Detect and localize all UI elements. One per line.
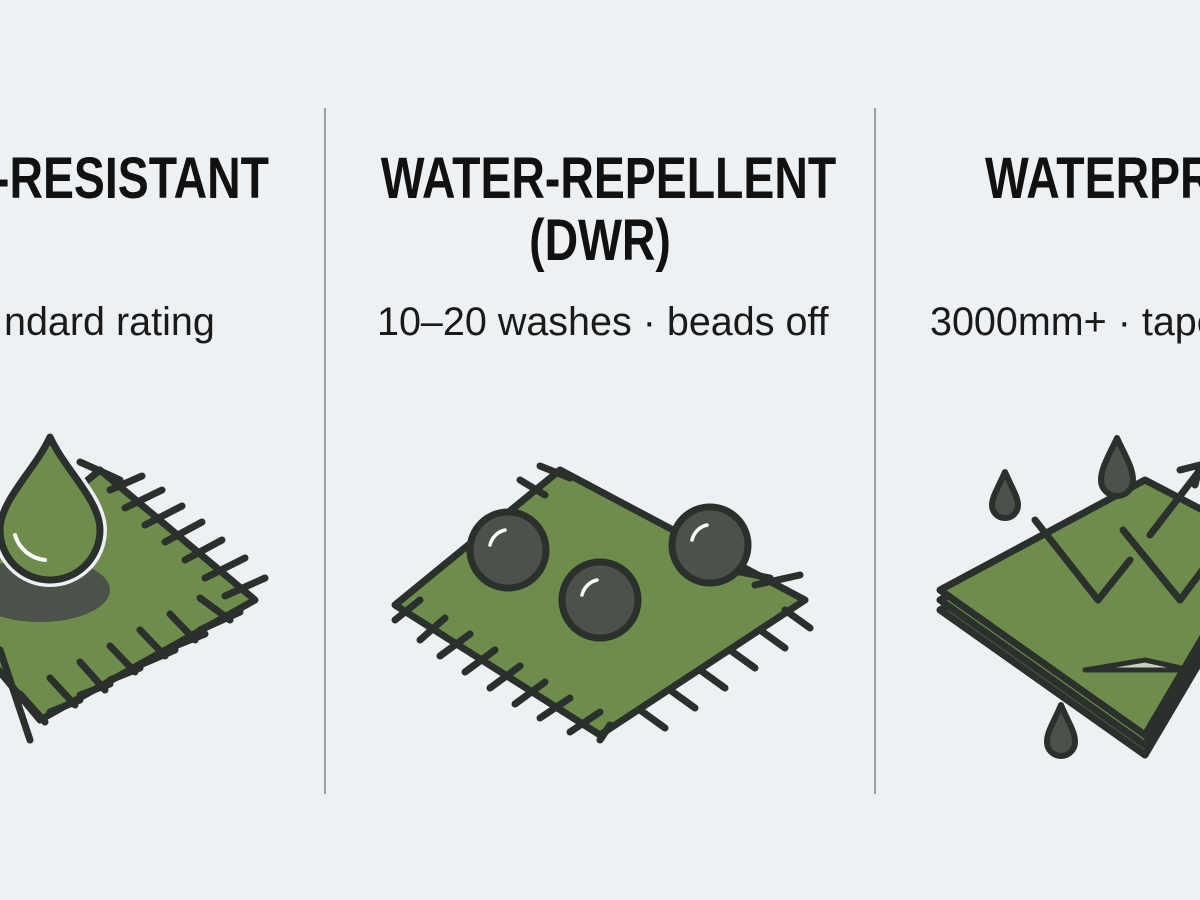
- icon: fabric with beads: [395, 466, 810, 740]
- heading: water-repellent: [380, 146, 836, 273]
- panel: water-repellent: [377, 146, 836, 344]
- subtitle: repellent: 10–20 washes · beads off: [377, 300, 829, 344]
- icon: fabric with water drop: [0, 437, 265, 740]
- heading: water-repellent: (DWR): [529, 208, 671, 273]
- subtitle: resistant: ndard rating: [4, 300, 215, 344]
- icon: layered waterproof fabric: [940, 438, 1200, 756]
- panel: waterproof: [930, 146, 1200, 344]
- panel: water-resistant: [0, 146, 269, 344]
- heading: resistant: -RESISTANT: [0, 146, 269, 211]
- heading: water-repellent: WATER-REPELLENT: [381, 146, 836, 211]
